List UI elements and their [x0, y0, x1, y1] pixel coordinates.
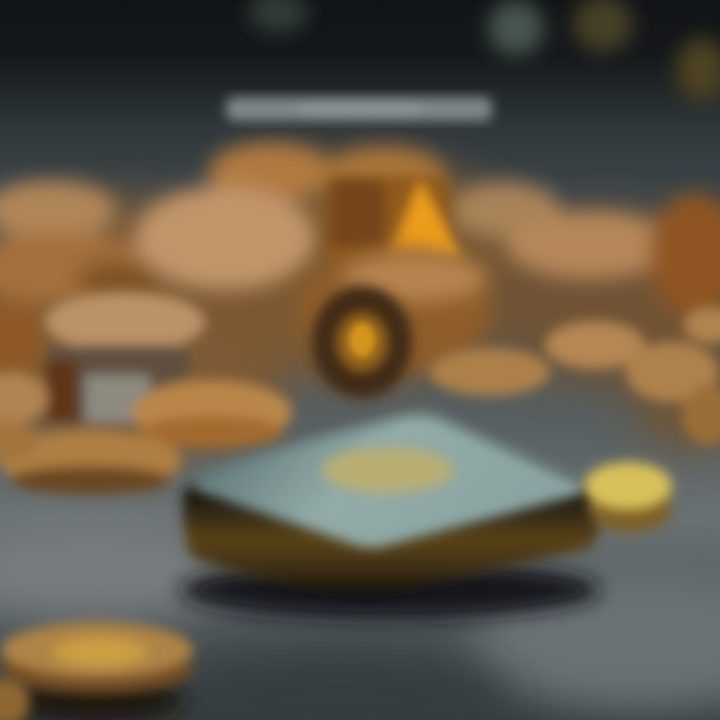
wallet and its shadow — [180, 413, 601, 618]
wallet: dark base — [183, 420, 601, 596]
wallet: gold emblem — [322, 447, 454, 493]
coin pile: back row — [0, 142, 720, 380]
wallet: ground shadow — [180, 562, 600, 618]
coin pile: left coins — [0, 292, 292, 494]
coin pile: tall stack with orange highlight — [325, 175, 462, 265]
blurred caption band — [226, 97, 492, 121]
foreground coin, bottom left — [0, 622, 193, 720]
background bokeh lights — [248, 0, 720, 102]
wallet: pale blue top — [195, 413, 584, 548]
bright yellow coin beside wallet — [584, 462, 672, 532]
coin pile: large front coin stack — [300, 248, 490, 398]
warm underlay of the coin pile — [0, 160, 720, 460]
coin pile: right coins — [430, 307, 720, 445]
